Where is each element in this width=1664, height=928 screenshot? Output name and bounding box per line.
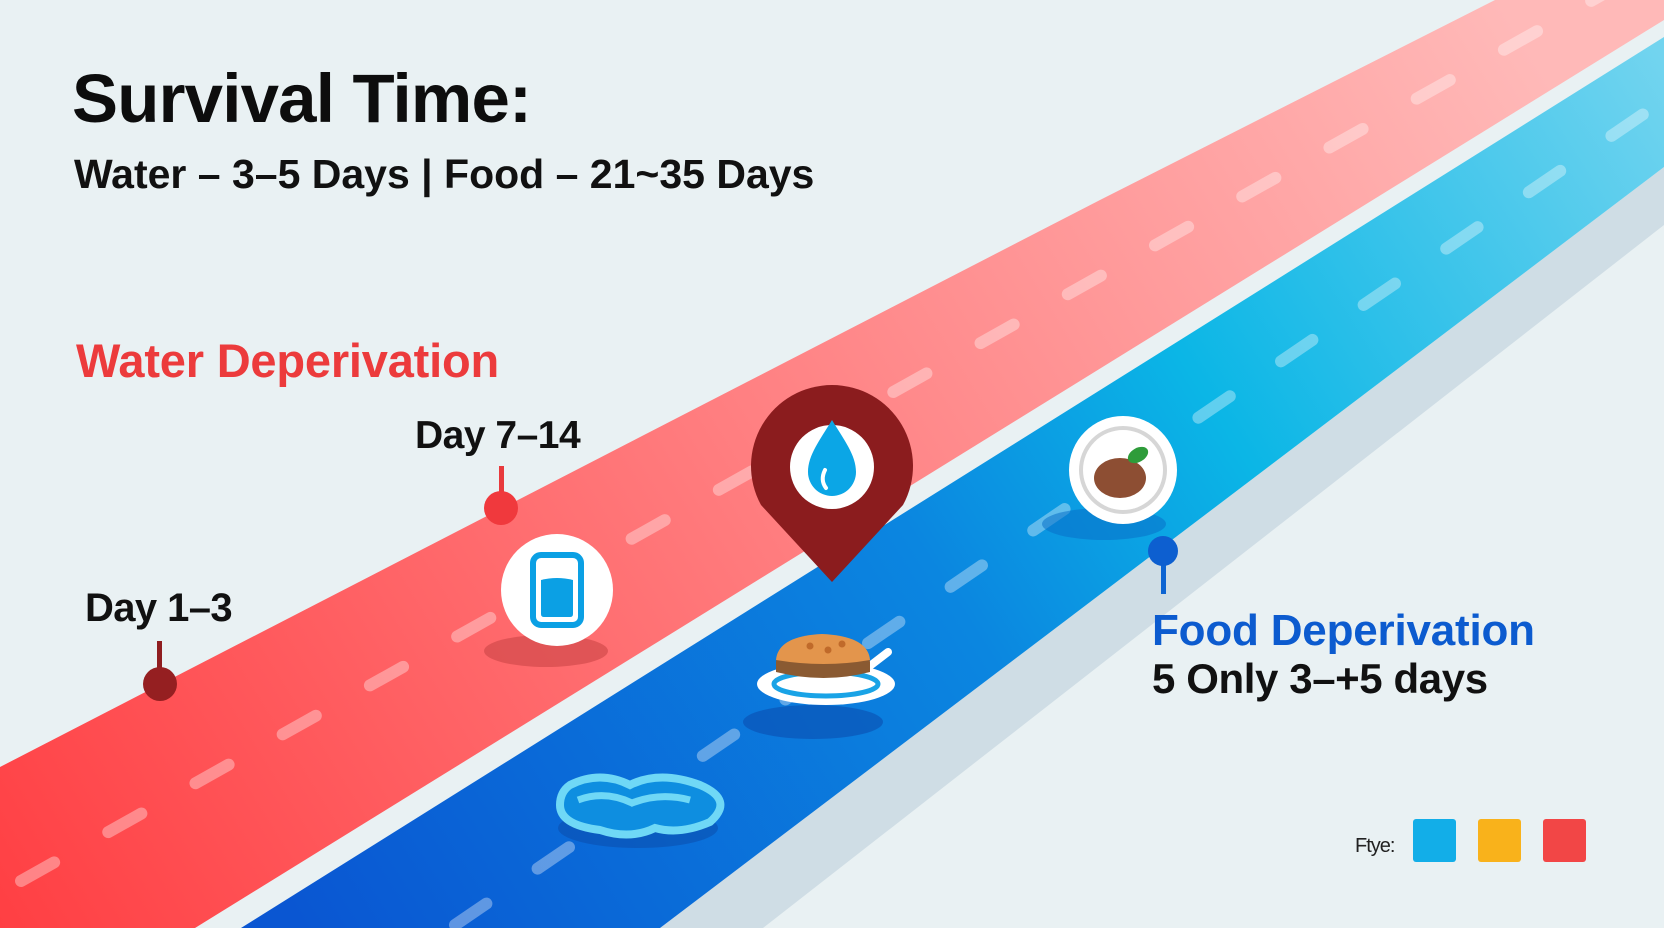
text: food note: 5 Only 3–+5 days — [1152, 655, 1488, 702]
subtitle: Water – 3–5 Days | Food – 21~35 Days — [74, 151, 814, 197]
icon: water puddle — [558, 778, 720, 848]
marker: day 7-14 — [484, 466, 518, 525]
icon: water glass — [484, 534, 613, 667]
title: Survival Time: — [72, 60, 531, 137]
icon: map pin with water drop — [751, 385, 913, 582]
label: Day 7-14: Day 7–14 — [415, 414, 581, 457]
marker: food — [1148, 536, 1178, 594]
legend — [1355, 819, 1586, 862]
legend: Ftye: — [1355, 835, 1394, 857]
heading: water deprivation: Water Deperivation — [76, 334, 499, 387]
icon: food plate — [1042, 416, 1177, 540]
icon: pancake on plate — [743, 634, 895, 739]
grey shadow band — [660, 167, 1664, 928]
heading: food deprivation: Food Deperivation — [1152, 606, 1535, 655]
marker: day 1-3 — [143, 641, 177, 701]
label: Day 1-3: Day 1–3 — [85, 586, 232, 630]
